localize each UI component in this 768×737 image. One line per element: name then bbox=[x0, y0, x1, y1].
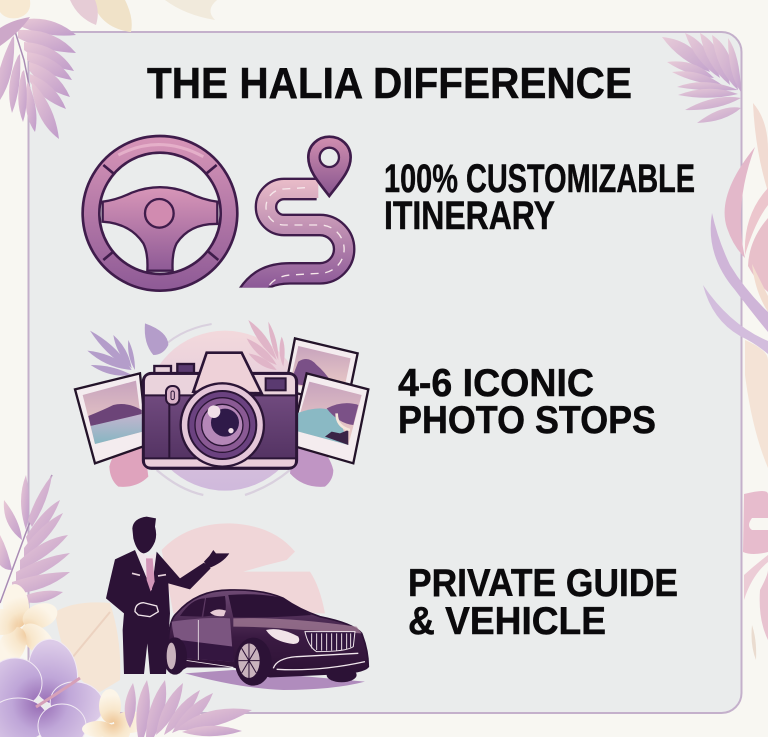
back right photo bbox=[285, 338, 358, 407]
icon: winding road and pin bbox=[247, 137, 351, 297]
decoration: right side foliage bbox=[703, 103, 768, 660]
text: private guide and vehicle: & VEHICLE bbox=[408, 600, 606, 643]
text: customizable itinerary: ITINERARY bbox=[384, 194, 555, 238]
text: photo stops bbox=[398, 362, 656, 442]
camera body bbox=[143, 353, 297, 468]
text: photo stops: PHOTO STOPS bbox=[398, 399, 656, 442]
guide silhouette bbox=[106, 517, 229, 674]
left photo bbox=[75, 373, 147, 463]
icon: steering wheel bbox=[83, 136, 237, 291]
backdrop disc bbox=[145, 331, 305, 491]
sunset backdrop bbox=[162, 523, 325, 613]
plumeria flower bbox=[0, 583, 61, 670]
decoration: top-left foliage bbox=[0, 0, 217, 139]
text: private guide and vehicle: PRIVATE GUIDE bbox=[408, 562, 678, 605]
text: photo stops: 4-6 ICONIC bbox=[398, 362, 594, 405]
car shadow bbox=[185, 670, 365, 690]
decoration: top-right palm frond bbox=[662, 33, 741, 123]
text: customizable itinerary bbox=[384, 157, 695, 238]
bottom frond bbox=[125, 680, 252, 737]
title: THE HALIA DIFFERENCE bbox=[147, 59, 632, 108]
tan monstera leaf bbox=[55, 602, 120, 692]
front right photo bbox=[290, 373, 368, 463]
leaves bbox=[87, 323, 168, 376]
decoration: bottom-left foliage bbox=[0, 475, 252, 737]
car bbox=[163, 590, 368, 686]
icon: camera with photos bbox=[75, 320, 368, 495]
small plumeria flower bbox=[82, 689, 146, 737]
lens bbox=[181, 383, 264, 467]
icon: guide and car bbox=[106, 517, 368, 690]
text: private guide and vehicle bbox=[408, 562, 678, 643]
hibiscus flower bbox=[0, 635, 108, 737]
